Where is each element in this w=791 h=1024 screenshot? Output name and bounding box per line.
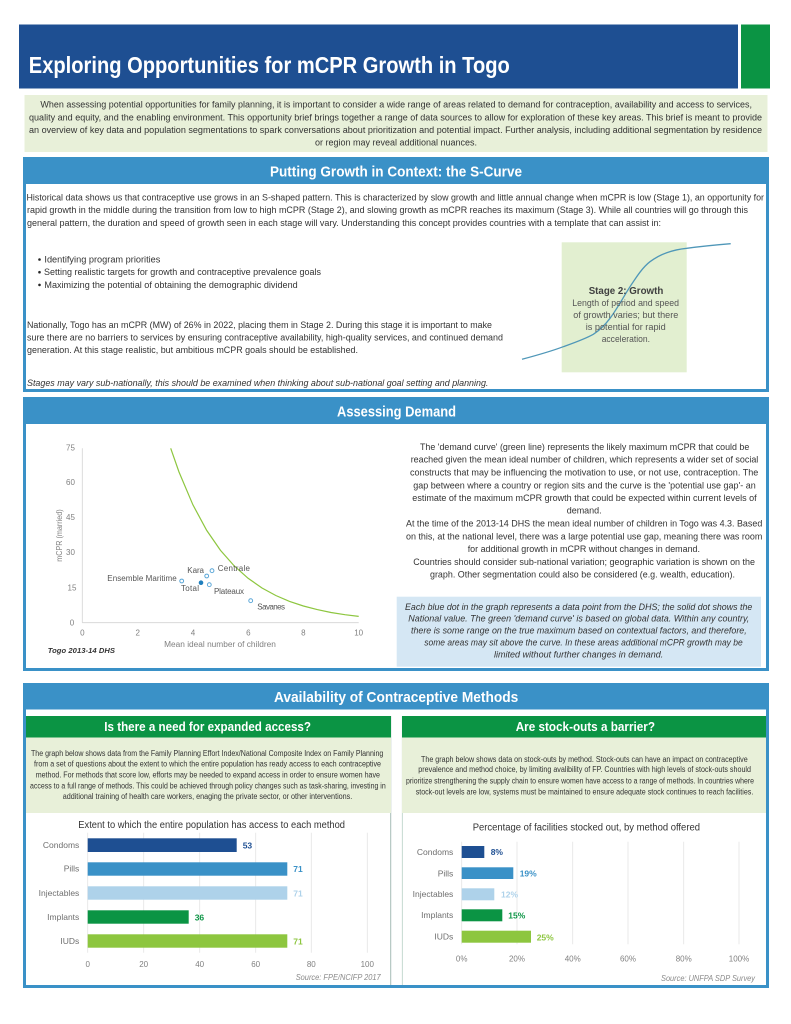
bar chart: facilities stocked out: 60%	[620, 954, 636, 963]
bar chart: access to each method: 71	[293, 936, 303, 946]
S-curve diagram: acceleration.	[602, 334, 650, 345]
text: demand curve explanation: Countries should consider sub-national variation; geographic variation is shown on the	[413, 557, 755, 568]
bar chart: access to each method: 0	[85, 960, 90, 969]
text: Togo national stage: sure there are no barriers to services by ensuring contraceptive availability, high-quality services, and continued demand	[27, 332, 503, 343]
panel: assessing demand	[23, 397, 769, 670]
panel: putting growth in context	[23, 157, 769, 390]
intro text block: an overview of key data and population segmentations to spark conversations about prioritization and potential impact. Further analysis, including additional segmentation by residence	[29, 125, 762, 136]
intro text block	[24, 95, 768, 152]
heading: assessing demand	[23, 397, 769, 424]
text: Togo national stage	[27, 320, 503, 356]
demand curve scatter chart: 75	[66, 443, 75, 452]
bar chart: access to each method	[39, 820, 381, 982]
demand curve scatter chart: 2	[135, 628, 140, 637]
bar chart: access to each method: 53	[243, 840, 252, 850]
demand curve scatter chart: 0	[80, 628, 85, 637]
title banner: Exploring Opportunities for mCPR Growth in Togo	[29, 52, 510, 78]
bar chart: facilities stocked out: 40%	[565, 954, 581, 963]
text: expanded access explanation: method. For methods that score low, efforts may be needed to expand access in order to ensure women have	[36, 771, 381, 780]
text: demand curve explanation: At the time of the 2013-14 DHS the mean ideal number of children in Togo was 4.3. Based	[406, 518, 762, 529]
text: demand curve explanation: The 'demand curve' (green line) represents the likely maximum mCPR that could be	[420, 442, 749, 453]
demand curve scatter chart: Mean ideal number of children	[164, 640, 276, 649]
bar chart: facilities stocked out: 15%	[508, 911, 526, 921]
bar chart: access to each method: 71	[293, 864, 303, 874]
bar chart: facilities stocked out: 80%	[676, 954, 692, 963]
bar chart: facilities stocked out: Implants	[421, 910, 453, 920]
bar chart: facilities stocked out: 19%	[520, 869, 537, 879]
bar chart: access to each method: 60	[251, 960, 261, 969]
heading: assessing demand: Assessing Demand	[337, 404, 456, 420]
sub-heading: expanded access: Is there a need for expanded access?	[104, 719, 311, 734]
bar chart: facilities stocked out: IUDs	[434, 932, 453, 942]
bar chart: access to each method: Extent to which the entire population has access to each method	[78, 820, 345, 831]
sub-heading: stock-outs	[402, 716, 766, 738]
demand curve scatter chart: 10	[354, 628, 364, 637]
text: stock-outs explanation	[402, 738, 766, 813]
text: stock-outs explanation: prioritize strengthening the supply chain to ensure women have access to a range of methods. In countries where	[406, 776, 755, 785]
bar chart: facilities stocked out: Pills	[438, 868, 453, 878]
bar chart: facilities stocked out: 100%	[729, 954, 749, 963]
bar chart: access to each method: IUDs	[60, 936, 79, 946]
panel: availability of contraceptive methods	[23, 683, 769, 986]
text: demand curve explanation: gap between where a country or region sits and the curve is the 'potential use gap'- an	[413, 480, 756, 491]
bar chart: facilities stocked out: Condoms	[417, 847, 453, 857]
text: Togo national stage: Nationally, Togo has an mCPR (MW) of 26% in 2022, placing them in Stage 2. During this stage it is important to make	[27, 320, 492, 331]
bar chart: access to each method: 36	[195, 912, 204, 922]
callout: how to read the graph	[397, 597, 761, 667]
bar chart: access to each method: 40	[195, 960, 205, 969]
bar chart: access to each method: Source: FPE/NCIFP 2017	[296, 973, 381, 982]
text: stock-outs explanation: stock-out levels are low, systems must be maintained to ensure adequate stock continues to reach facilities.	[416, 787, 753, 796]
bar chart: access to each method: 71	[293, 888, 303, 898]
S-curve diagram: Length of period and speed	[572, 298, 679, 309]
text: Togo national stage: generation. At this stage realistic, but ambitious mCPR goals should be established.	[27, 345, 358, 356]
demand curve scatter chart: Togo 2013-14 DHS	[48, 646, 115, 655]
heading: S-curve section	[23, 157, 769, 184]
bullet list: Identifying program priorities	[44, 254, 161, 266]
sub-panel: stock-outs	[402, 716, 766, 985]
demand curve scatter chart: 30	[66, 548, 75, 557]
text: demand curve explanation: constructs that may be influencing the motivation to use, or not use, contraception. The	[410, 468, 758, 479]
bar chart: access to each method: Implants	[47, 912, 79, 922]
bar chart: access to each method: 20	[139, 960, 149, 969]
bar chart: access to each method: Pills	[64, 864, 79, 874]
demand curve scatter chart: 4	[191, 628, 196, 637]
demand curve scatter chart: 0	[70, 618, 75, 628]
S-curve diagram	[522, 242, 731, 372]
bar chart: facilities stocked out: 12%	[501, 890, 518, 900]
intro text block: or region may reveal additional nuances.	[315, 138, 477, 149]
sub-panel: expanded access	[26, 716, 391, 985]
text: demand curve explanation: for additional growth in mCPR without changes in demand.	[468, 544, 700, 555]
intro text block: quality and equity, and the enabling environment. This opportunity brief brings together a range of data sources to allow for exploration of these key areas. This brief is meant to provide	[29, 112, 762, 123]
S-curve diagram: of growth varies; but there	[573, 310, 678, 321]
text: demand curve explanation: demand.	[567, 506, 602, 517]
text: expanded access explanation: The graph below shows data from the Family Planning Effort Index/National Composite Index on Family Planning	[31, 749, 383, 758]
demand curve scatter chart: Plateaux	[214, 587, 244, 596]
demand curve scatter chart: Total	[181, 584, 199, 593]
text: S-curve explanation: rapid growth in the middle during the transition from low to high mCPR (Stage 2), and slowing growth as mCPR reaches its maximum (Stage 3). While all countries will go through this	[27, 205, 748, 216]
sub-heading: stock-outs: Are stock-outs a barrier?	[516, 719, 655, 734]
demand curve scatter chart: 8	[301, 628, 306, 637]
bar chart: facilities stocked out: 20%	[509, 954, 525, 963]
bar chart: facilities stocked out: 8%	[491, 847, 503, 857]
callout: how to read the graph: there is some range on the true maximum based on contextual factors, and therefore,	[411, 626, 747, 637]
demand curve scatter chart: Kara	[187, 566, 205, 575]
demand curve scatter chart: 60	[66, 478, 75, 487]
bar chart: access to each method: Injectables	[39, 888, 79, 898]
text: demand curve explanation: reached given the mean ideal number of children, which represents a wider set of social	[411, 455, 758, 466]
text: expanded access explanation: from a set of questions about the extent to which the entire population has ready access to each contraceptive	[34, 760, 382, 769]
callout: how to read the graph: limited without further changes in demand.	[494, 650, 663, 661]
sub-heading: expanded access	[26, 716, 391, 738]
demand curve scatter chart	[48, 443, 364, 655]
text: S-curve explanation: general pattern, the duration and speed of growth seen in each stage will vary. Understanding this concept provides countries with a template that can assist in:	[27, 218, 661, 229]
demand curve scatter chart: mCPR (married)	[55, 509, 64, 562]
text: stock-outs explanation: prevalence and method choice, by limiting avalibility of FP. Countries with high levels of stock-outs should	[418, 765, 751, 774]
bullet list	[38, 254, 321, 291]
bar chart: access to each method: Condoms	[43, 840, 79, 850]
text: demand curve explanation: graph. Other segmentation could also be considered (e.g. wealth, education).	[430, 570, 735, 581]
S-curve diagram: is potential for rapid	[586, 322, 666, 333]
demand curve scatter chart: 15	[68, 583, 77, 592]
callout: how to read the graph: some areas may sit above the curve. In these areas additional mCPR growth may be	[424, 638, 743, 649]
text: expanded access explanation: access to a full range of methods. This could be achieved through policy changes such as task-sharing, investing in	[30, 781, 386, 790]
text: expanded access explanation	[26, 738, 391, 813]
heading: availability: Availability of Contraceptive Methods	[274, 689, 518, 706]
bar chart: facilities stocked out: Injectables	[413, 889, 453, 899]
text: demand curve explanation	[406, 442, 762, 581]
S-curve diagram: Stage 2: Growth	[589, 286, 663, 297]
text: demand curve explanation: on this, at the national level, there was a large potential use gap, meaning there was room	[406, 531, 762, 542]
green accent block	[741, 24, 770, 88]
bar chart: facilities stocked out: Source: UNFPA SDP Survey	[661, 974, 756, 983]
text: expanded access explanation: additional training of health care workers, enaging the private sector, or other interventions.	[63, 792, 352, 801]
intro text block: When assessing potential opportunities for family planning, it is important to consider a wide range of areas related to demand for contraception, availability and access to services,	[40, 100, 752, 110]
callout: how to read the graph: Each blue dot in the graph represents a data point from the DHS; the solid dot shows the	[405, 602, 752, 613]
demand curve scatter chart: Savanes	[257, 602, 285, 611]
bullet list: Maximizing the potential of obtaining the demographic dividend	[44, 280, 298, 291]
bullet list: Setting realistic targets for growth and contraceptive prevalence goals	[44, 267, 321, 278]
bar chart: facilities stocked out	[413, 823, 756, 983]
demand curve scatter chart: Centrale	[218, 564, 251, 573]
text: demand curve explanation: estimate of the maximum mCPR growth that could be expected within current levels of	[412, 493, 757, 504]
bar chart: facilities stocked out: 0%	[456, 954, 467, 963]
note: sub-national stages: Stages may vary sub-nationally, this should be examined when thinking about sub-national goal setting and planning.	[27, 378, 488, 389]
text: stock-outs explanation: The graph below shows data on stock-outs by method. Stock-outs can have an impact on contraceptive	[421, 755, 748, 764]
bar chart: access to each method: 80	[307, 960, 316, 969]
demand curve scatter chart: 6	[246, 628, 251, 637]
bar chart: facilities stocked out: 25%	[537, 932, 554, 942]
callout: how to read the graph: National value. The green 'demand curve' is based on global data. Within any country,	[408, 614, 749, 625]
text: S-curve explanation	[26, 192, 765, 229]
demand curve scatter chart: Ensemble Maritime	[107, 574, 177, 583]
bar chart: access to each method: 100	[361, 960, 375, 969]
heading: availability	[23, 683, 769, 710]
demand curve scatter chart: 45	[66, 513, 75, 522]
heading: S-curve section: Putting Growth in Context: the S-Curve	[270, 164, 522, 180]
title banner	[19, 24, 738, 88]
bar chart: facilities stocked out: Percentage of facilities stocked out, by method offered	[473, 823, 700, 834]
